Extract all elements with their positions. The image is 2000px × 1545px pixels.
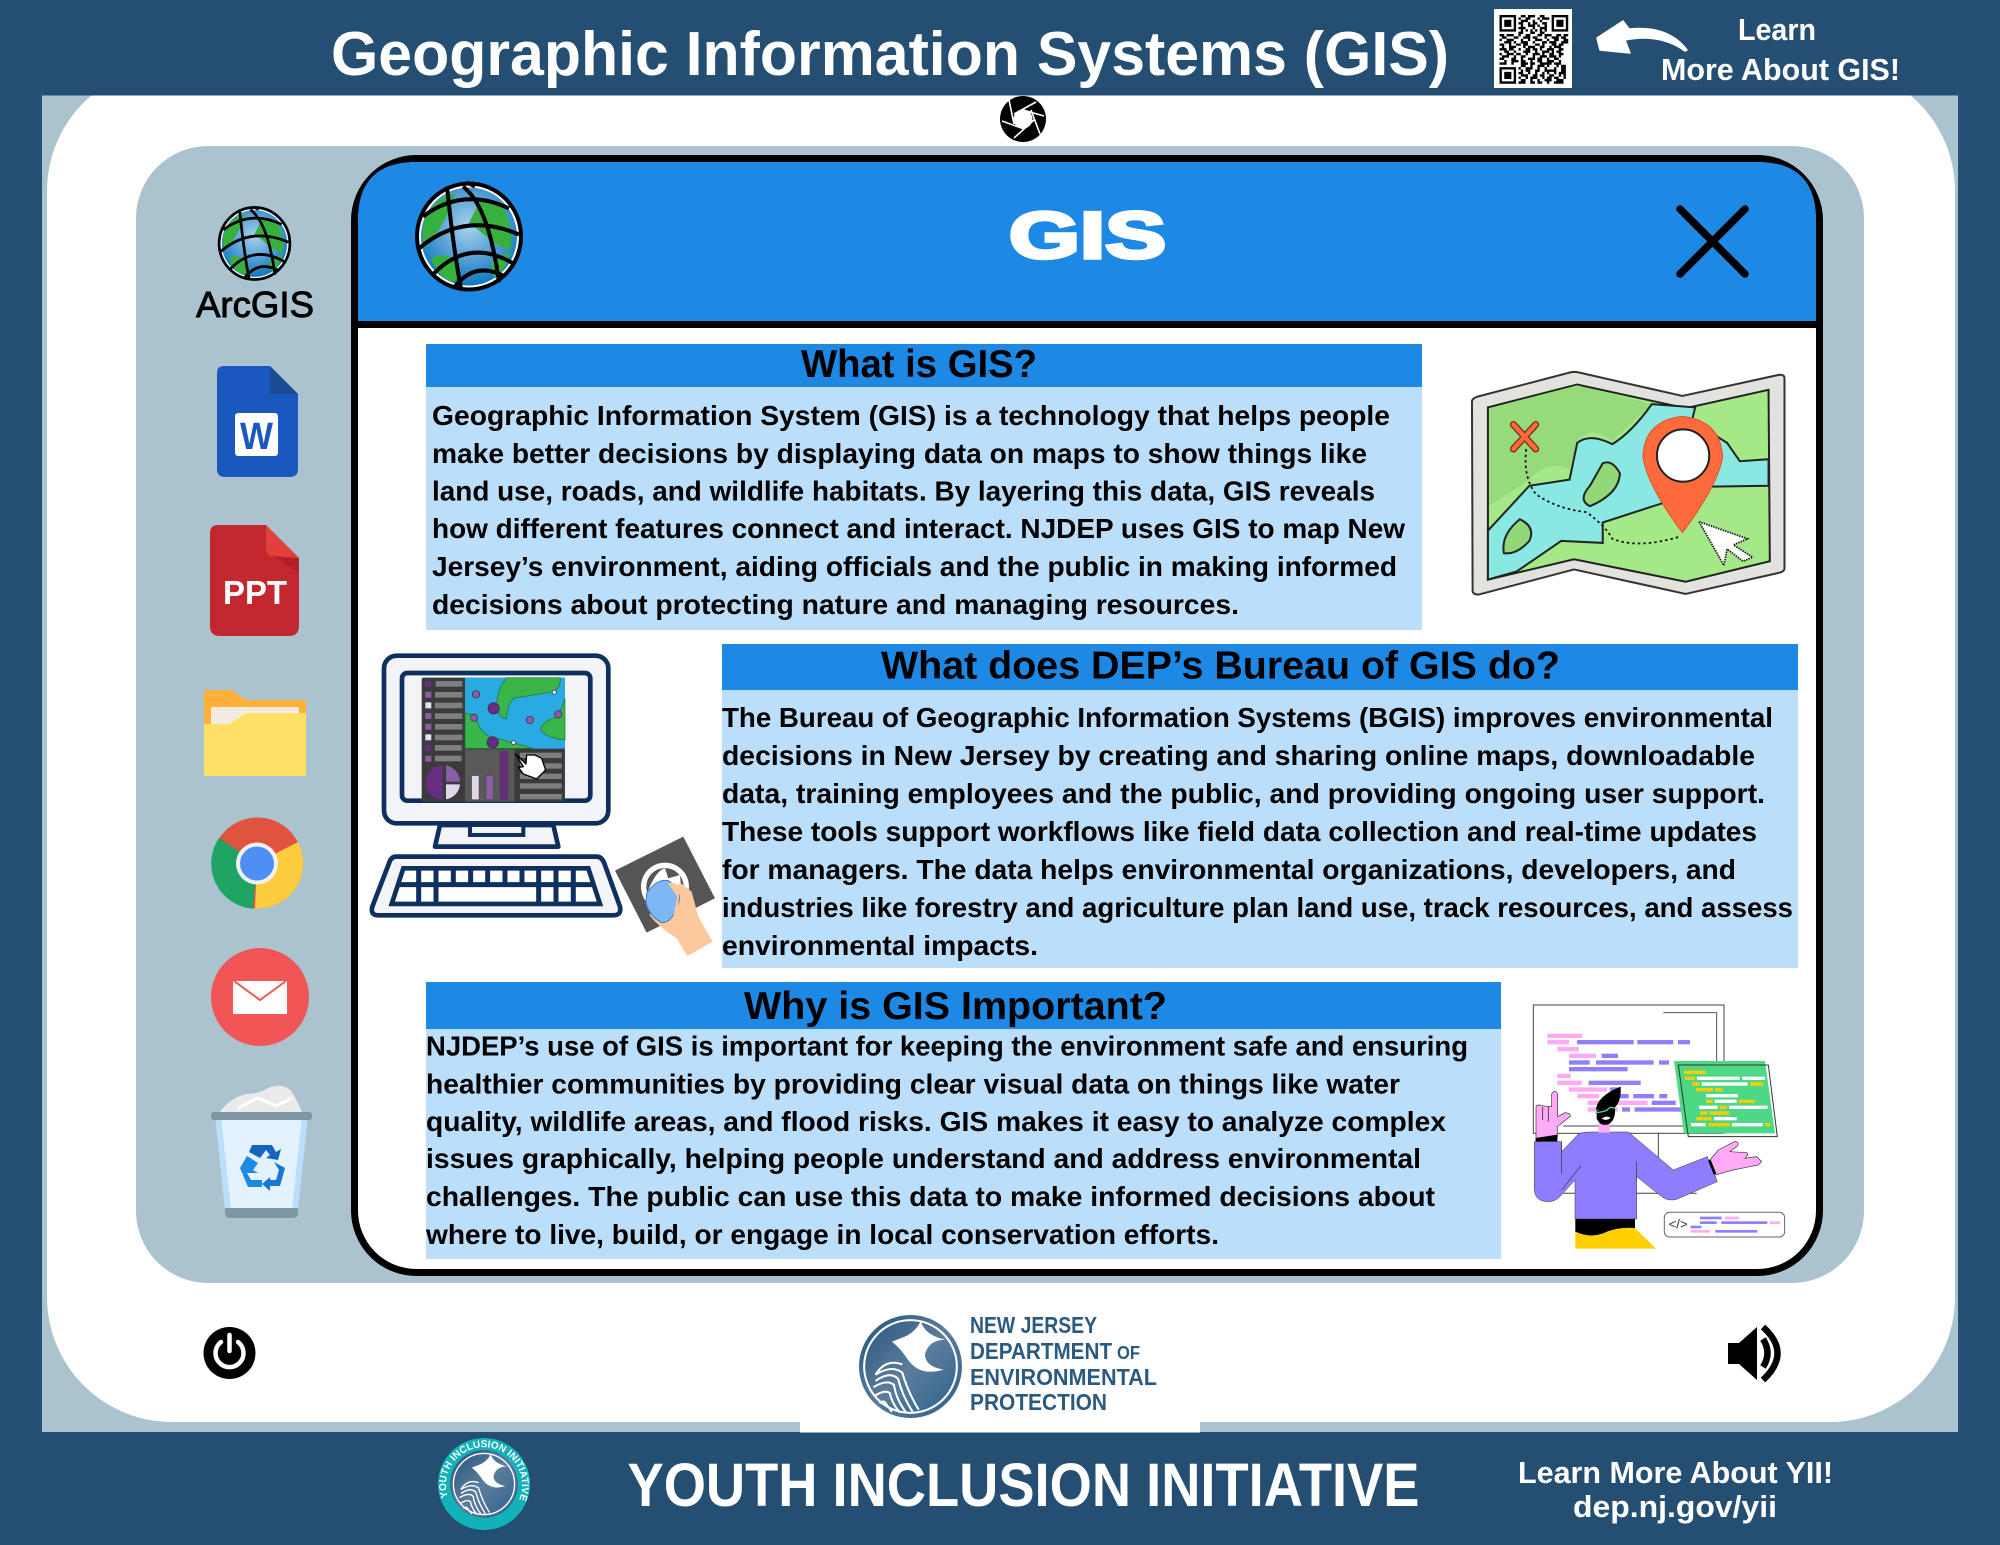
footer heading: YOUTH INCLUSION INITIATIVE: [628, 1451, 1420, 1519]
icon: recycle bin: [211, 1086, 312, 1218]
text block: Bureau of GIS: The Bureau of Geographic Information Systems (BGIS) improves environmental: [722, 702, 1773, 733]
monitor: [384, 656, 608, 847]
Youth Inclusion Initiative logo: [438, 1438, 530, 1530]
code chip: </>: [1669, 1217, 1688, 1231]
text block: What is GIS: land use, roads, and wildlife habitats. By layering this data, GIS reveals: [432, 476, 1375, 506]
arrow pointing to QR code: [1597, 21, 1687, 53]
heading: What is GIS: What is GIS?: [801, 343, 1037, 386]
text block: What is GIS: Geographic Information System (GIS) is a technology that helps people: [432, 400, 1390, 431]
text block: What is GIS: Jersey’s environment, aiding officials and the public in making informed: [432, 551, 1397, 582]
text block: Bureau of GIS: These tools support workflows like field data collection and real-time updates: [722, 816, 1757, 847]
code chip: [1664, 1212, 1785, 1237]
text block: Why is GIS Important: quality, wildlife areas, and flood risks. GIS makes it easy to analyze complex: [426, 1106, 1446, 1137]
text block: Why is GIS Important: issues graphically, helping people understand and address environmental: [426, 1143, 1421, 1174]
mouse pad and hand: [615, 837, 715, 956]
text block: Bureau of GIS: data, training employees and the public, and providing ongoing user support.: [722, 778, 1765, 809]
text block: Why is GIS Important: [425, 1030, 1468, 1250]
GIS window: [354, 158, 1820, 1272]
GIS dashboard on screen: [422, 678, 565, 802]
heading: Bureau of GIS: What does DEP’s Bureau of GIS do?: [881, 644, 1560, 688]
desktop icons sidebar: [196, 207, 314, 1218]
NJDEP wordmark: NEW JERSEY: [970, 1312, 1097, 1338]
text block: Why is GIS Important: where to live, build, or engage in local conservation efforts.: [425, 1219, 1219, 1250]
NJDEP wordmark: [970, 1312, 1157, 1415]
footer link text: dep.nj.gov/yii: [1573, 1489, 1777, 1524]
footer link text: [1518, 1455, 1833, 1524]
QR code: [1494, 9, 1572, 88]
icon: PowerPoint document: PPT: [223, 574, 287, 611]
QR caption: [1661, 12, 1900, 87]
NJDEP logo: [859, 1312, 1157, 1418]
footer link text: Learn More About YII!: [1518, 1455, 1833, 1490]
icon: camera shutter: [1000, 96, 1046, 142]
text block: Bureau of GIS: for managers. The data helps environmental organizations, developers, and: [722, 854, 1736, 885]
icon: Word document: [217, 366, 298, 477]
text block: What is GIS: make better decisions by displaying data on maps to show things like: [432, 438, 1367, 469]
text block: Why is GIS Important: healthier communities by providing clear visual data on things like water: [426, 1068, 1400, 1100]
illustration: folded map with pin: [1472, 372, 1784, 594]
QR caption: Learn: [1738, 12, 1816, 47]
title: Geographic Information Systems (GIS): [331, 20, 1449, 89]
icon: ArcGIS globe: [219, 207, 290, 280]
panel: Why is GIS Important: [425, 982, 1501, 1259]
window heading: GIS: GIS: [1009, 198, 1166, 272]
NJDEP wordmark: OF: [1117, 1343, 1140, 1363]
text block: Bureau of GIS: [722, 702, 1793, 961]
NJDEP wordmark: PROTECTION: [970, 1389, 1107, 1415]
icon: speaker: [1728, 1327, 1778, 1380]
text block: Why is GIS Important: NJDEP’s use of GIS is important for keeping the environment safe and ensuring: [426, 1030, 1468, 1062]
icon: close X: [1680, 209, 1745, 274]
text block: Bureau of GIS: decisions in New Jersey by creating and sharing online maps, downloadable: [722, 740, 1755, 771]
keyboard: [372, 857, 620, 915]
text block: Bureau of GIS: environmental impacts.: [722, 930, 1038, 961]
window title bar: [354, 162, 1820, 328]
code screens: [1533, 1005, 1777, 1193]
bottom bar background: [0, 1432, 2000, 1545]
icon: window globe: [417, 182, 521, 290]
window body: [354, 158, 1820, 1272]
panel: Bureau of GIS: [722, 644, 1798, 968]
illustration: person presenting code: [1533, 1005, 1785, 1249]
NJDEP seal: [859, 1315, 962, 1418]
icon: Chrome browser: [211, 818, 303, 909]
desktop panel: [136, 146, 1864, 1283]
text block: Why is GIS Important: challenges. The public can use this data to make informed decisions about: [426, 1181, 1435, 1212]
top header bar background: [0, 0, 2000, 96]
person: [1534, 1087, 1762, 1249]
Youth Inclusion Initiative logo: YOUTH INCLUSION INITIATIVE: [439, 1440, 529, 1502]
NJDEP wordmark: ENVIRONMENTAL: [970, 1364, 1157, 1390]
text block: What is GIS: how different features connect and interact. NJDEP uses GIS to map New: [432, 513, 1405, 544]
heading: Why is GIS Important: Why is GIS Important?: [744, 985, 1167, 1028]
icon: Word document: W: [240, 416, 273, 458]
icon: PowerPoint document: [210, 525, 299, 636]
label: ArcGIS: ArcGIS: [196, 284, 314, 325]
text block: What is GIS: [432, 400, 1405, 620]
NJDEP wordmark: DEPARTMENT: [970, 1338, 1112, 1364]
illustration: computer with GIS dashboard: [372, 656, 715, 956]
QR caption: More About GIS!: [1661, 52, 1900, 87]
icon: folder: [204, 690, 306, 776]
icon: power button: [204, 1327, 256, 1379]
text block: Bureau of GIS: industries like forestry and agriculture plan land use, track resources, and assess: [722, 892, 1793, 923]
icon: mail: [211, 948, 309, 1046]
panel: What is GIS: [426, 343, 1422, 630]
text block: What is GIS: decisions about protecting nature and managing resources.: [432, 589, 1239, 620]
